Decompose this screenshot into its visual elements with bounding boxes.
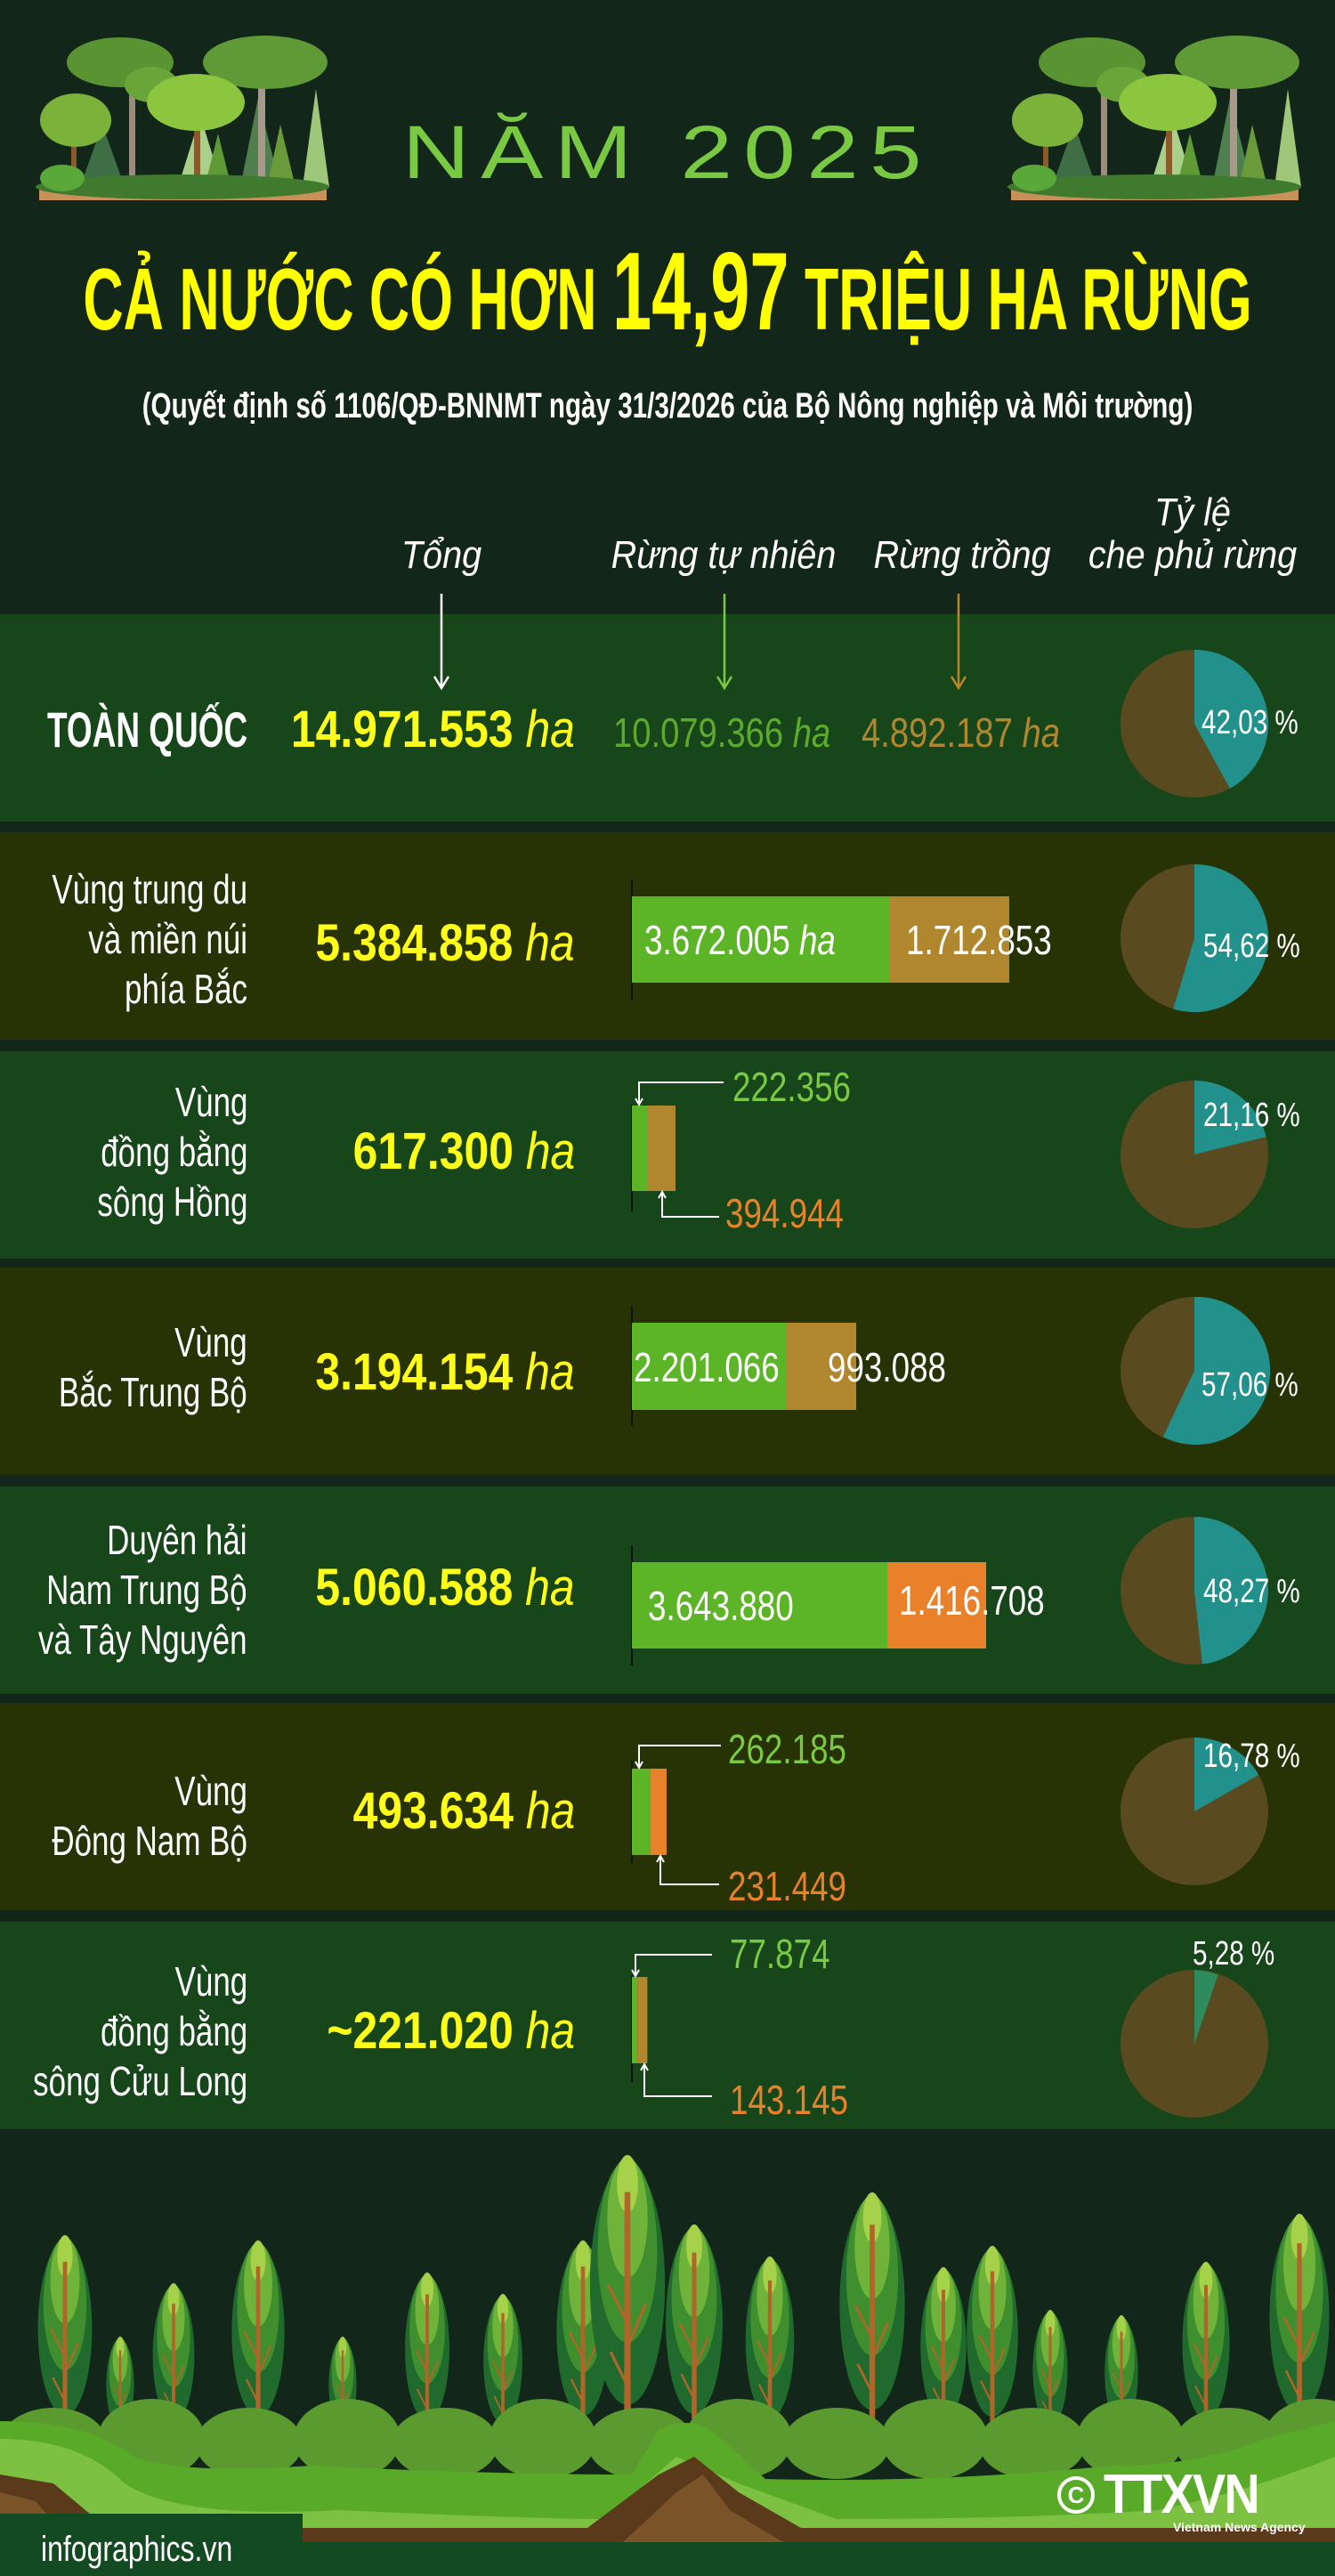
column headers — [401, 490, 1297, 577]
panel: Đông Nam Bộ: 231.449 — [728, 1863, 846, 1909]
logo: TTXVN: Vietnam News Agency — [1173, 2520, 1306, 2534]
panel: đồng bằng sông Hồng: Vùng — [174, 1079, 247, 1125]
title: CẢ NƯỚC CÓ HƠN 14,97 TRIỆU HA RỪNG — [83, 231, 1252, 353]
panel: đồng bằng sông Hồng: 394.944 — [725, 1190, 844, 1236]
panel: đồng bằng sông Cửu Long: 143.145 — [730, 2077, 848, 2123]
panel: Bắc Trung Bộ: 993.088 — [828, 1344, 946, 1390]
icon: forest cluster left — [36, 36, 329, 200]
panel: Duyên hải Nam Trung Bộ và Tây Nguyên: Nam Trung Bộ — [47, 1567, 247, 1613]
logo: TTXVN: TTXVN — [1104, 2464, 1258, 2525]
panel: Duyên hải Nam Trung Bộ và Tây Nguyên: 3.643.880 — [648, 1583, 794, 1629]
stacked bar — [631, 879, 633, 1000]
panel: trung du miền núi phía Bắc: 54,62 % — [1203, 928, 1300, 965]
stacked bar — [631, 1306, 633, 1426]
panel: đồng bằng sông Hồng: 617.300 ha — [352, 1122, 575, 1180]
panel: Bắc Trung Bộ: 2.201.066 — [634, 1344, 780, 1390]
panel: Bắc Trung Bộ: 3.194.154 ha — [316, 1343, 575, 1401]
logo: TTXVN: C — [1068, 2482, 1084, 2508]
panel: đồng bằng sông Hồng: 21,16 % — [1203, 1097, 1300, 1134]
pie chart — [1121, 1738, 1268, 1885]
panel: trung du miền núi phía Bắc: và miền núi — [88, 916, 247, 962]
pie chart — [1121, 864, 1269, 1012]
panel: Đông Nam Bộ: 16,78 % — [1203, 1738, 1300, 1775]
pie chart — [1121, 650, 1268, 798]
panel: Đông Nam Bộ: Vùng — [174, 1768, 247, 1814]
panel: toàn quốc — [0, 614, 1335, 822]
pie chart — [1121, 1970, 1268, 2118]
panel: trung du miền núi phía Bắc: 5.384.858 ha — [316, 914, 575, 972]
small bar with callouts — [631, 1745, 721, 1885]
panel: toàn quốc: 14.971.553 ha — [291, 701, 575, 758]
panel: Đông Nam Bộ — [0, 1703, 1335, 1910]
panel: đồng bằng sông Cửu Long: 77.874 — [730, 1931, 830, 1977]
panel: trung du miền núi phía Bắc — [0, 832, 1335, 1040]
icon: forest cluster right — [1007, 36, 1301, 200]
panel: đồng bằng sông Cửu Long: Vùng — [174, 1958, 247, 2005]
panel: toàn quốc: TOÀN QUỐC — [47, 701, 247, 757]
panel: Bắc Trung Bộ: Vùng — [174, 1319, 247, 1365]
header: tỷ lệ che phủ rừng: che phủ rừng — [1088, 533, 1297, 577]
panel: đồng bằng sông Hồng — [0, 1051, 1335, 1259]
header: tỷ lệ che phủ rừng — [1088, 490, 1297, 577]
panel: trung du miền núi phía Bắc: 1.712.853 — [906, 917, 1052, 963]
panel: đồng bằng sông Hồng: 222.356 — [732, 1064, 851, 1110]
panel: đồng bằng sông Hồng: đồng bằng — [101, 1129, 247, 1175]
header: Rừng trồng: Rừng trồng — [873, 533, 1051, 577]
panel: Duyên hải Nam Trung Bộ và Tây Nguyên: 1.416.708 — [899, 1577, 1045, 1624]
panel: Đông Nam Bộ: 262.185 — [728, 1726, 846, 1772]
header: Rừng tự nhiên: Rừng tự nhiên — [611, 533, 836, 577]
panel: đồng bằng sông Hồng: sông Hồng — [97, 1179, 247, 1225]
panel: Bắc Trung Bộ: Bắc Trung Bộ — [59, 1369, 247, 1415]
panel: đồng bằng sông Cửu Long: sông Cửu Long — [33, 2058, 247, 2104]
pie chart — [1121, 1517, 1268, 1665]
panel: toàn quốc: 42,03 % — [1202, 704, 1299, 741]
header: Tổng: Tổng — [401, 533, 481, 577]
panel: đồng bằng sông Cửu Long — [0, 1922, 1335, 2129]
panel: trung du miền núi phía Bắc: Vùng trung du — [52, 866, 247, 912]
panel: trung du miền núi phía Bắc: phía Bắc — [125, 966, 247, 1012]
arrows — [433, 594, 967, 691]
header: tỷ lệ che phủ rừng: Tỷ lệ — [1154, 490, 1231, 534]
panel: đồng bằng sông Cửu Long: đồng bằng — [101, 2008, 247, 2054]
heading: year: NĂM 2025 — [402, 110, 933, 194]
panel: trung du miền núi phía Bắc: 3.672.005 ha — [644, 917, 836, 963]
illustration: bottom forest — [0, 2155, 1335, 2576]
panel: Duyên hải Nam Trung Bộ và Tây Nguyên: và Tây Nguyên — [39, 1616, 247, 1663]
logo: TTXVN — [1057, 2464, 1306, 2534]
panel: toàn quốc: 10.079.366 ha — [613, 709, 830, 756]
panel: toàn quốc: 4.892.187 ha — [862, 709, 1060, 756]
footer: infographics.vn — [0, 2514, 303, 2576]
panel: Duyên hải Nam Trung Bộ và Tây Nguyên: 48,27 % — [1203, 1573, 1300, 1610]
panel: đồng bằng sông Cửu Long: 5,28 % — [1193, 1935, 1274, 1973]
panel: Duyên hải Nam Trung Bộ và Tây Nguyên: 5.060.588 ha — [316, 1559, 575, 1616]
panel: Đông Nam Bộ: 493.634 ha — [352, 1782, 575, 1840]
subtitle: (Quyết định số 1106/QĐ-BNNMT ngày 31/3/2026 của Bộ Nông nghiệp và Môi trường) — [142, 386, 1193, 425]
footer: infographics.vn: infographics.vn — [41, 2530, 232, 2569]
small bar with callouts — [631, 1081, 724, 1218]
small bar with callouts — [631, 1954, 712, 2097]
pie chart — [1121, 1297, 1271, 1445]
panel: Duyên hải Nam Trung Bộ và Tây Nguyên — [0, 1486, 1335, 1694]
panel: đồng bằng sông Cửu Long: ~221.020 ha — [327, 2002, 575, 2060]
pie chart — [1121, 1081, 1268, 1228]
panel: Duyên hải Nam Trung Bộ và Tây Nguyên: Duyên hải — [108, 1517, 247, 1563]
panel: Bắc Trung Bộ: 57,06 % — [1202, 1366, 1299, 1404]
panel: Đông Nam Bộ: Đông Nam Bộ — [52, 1818, 247, 1864]
panel: Bắc Trung Bộ — [0, 1268, 1335, 1475]
stacked bar — [631, 1545, 633, 1665]
